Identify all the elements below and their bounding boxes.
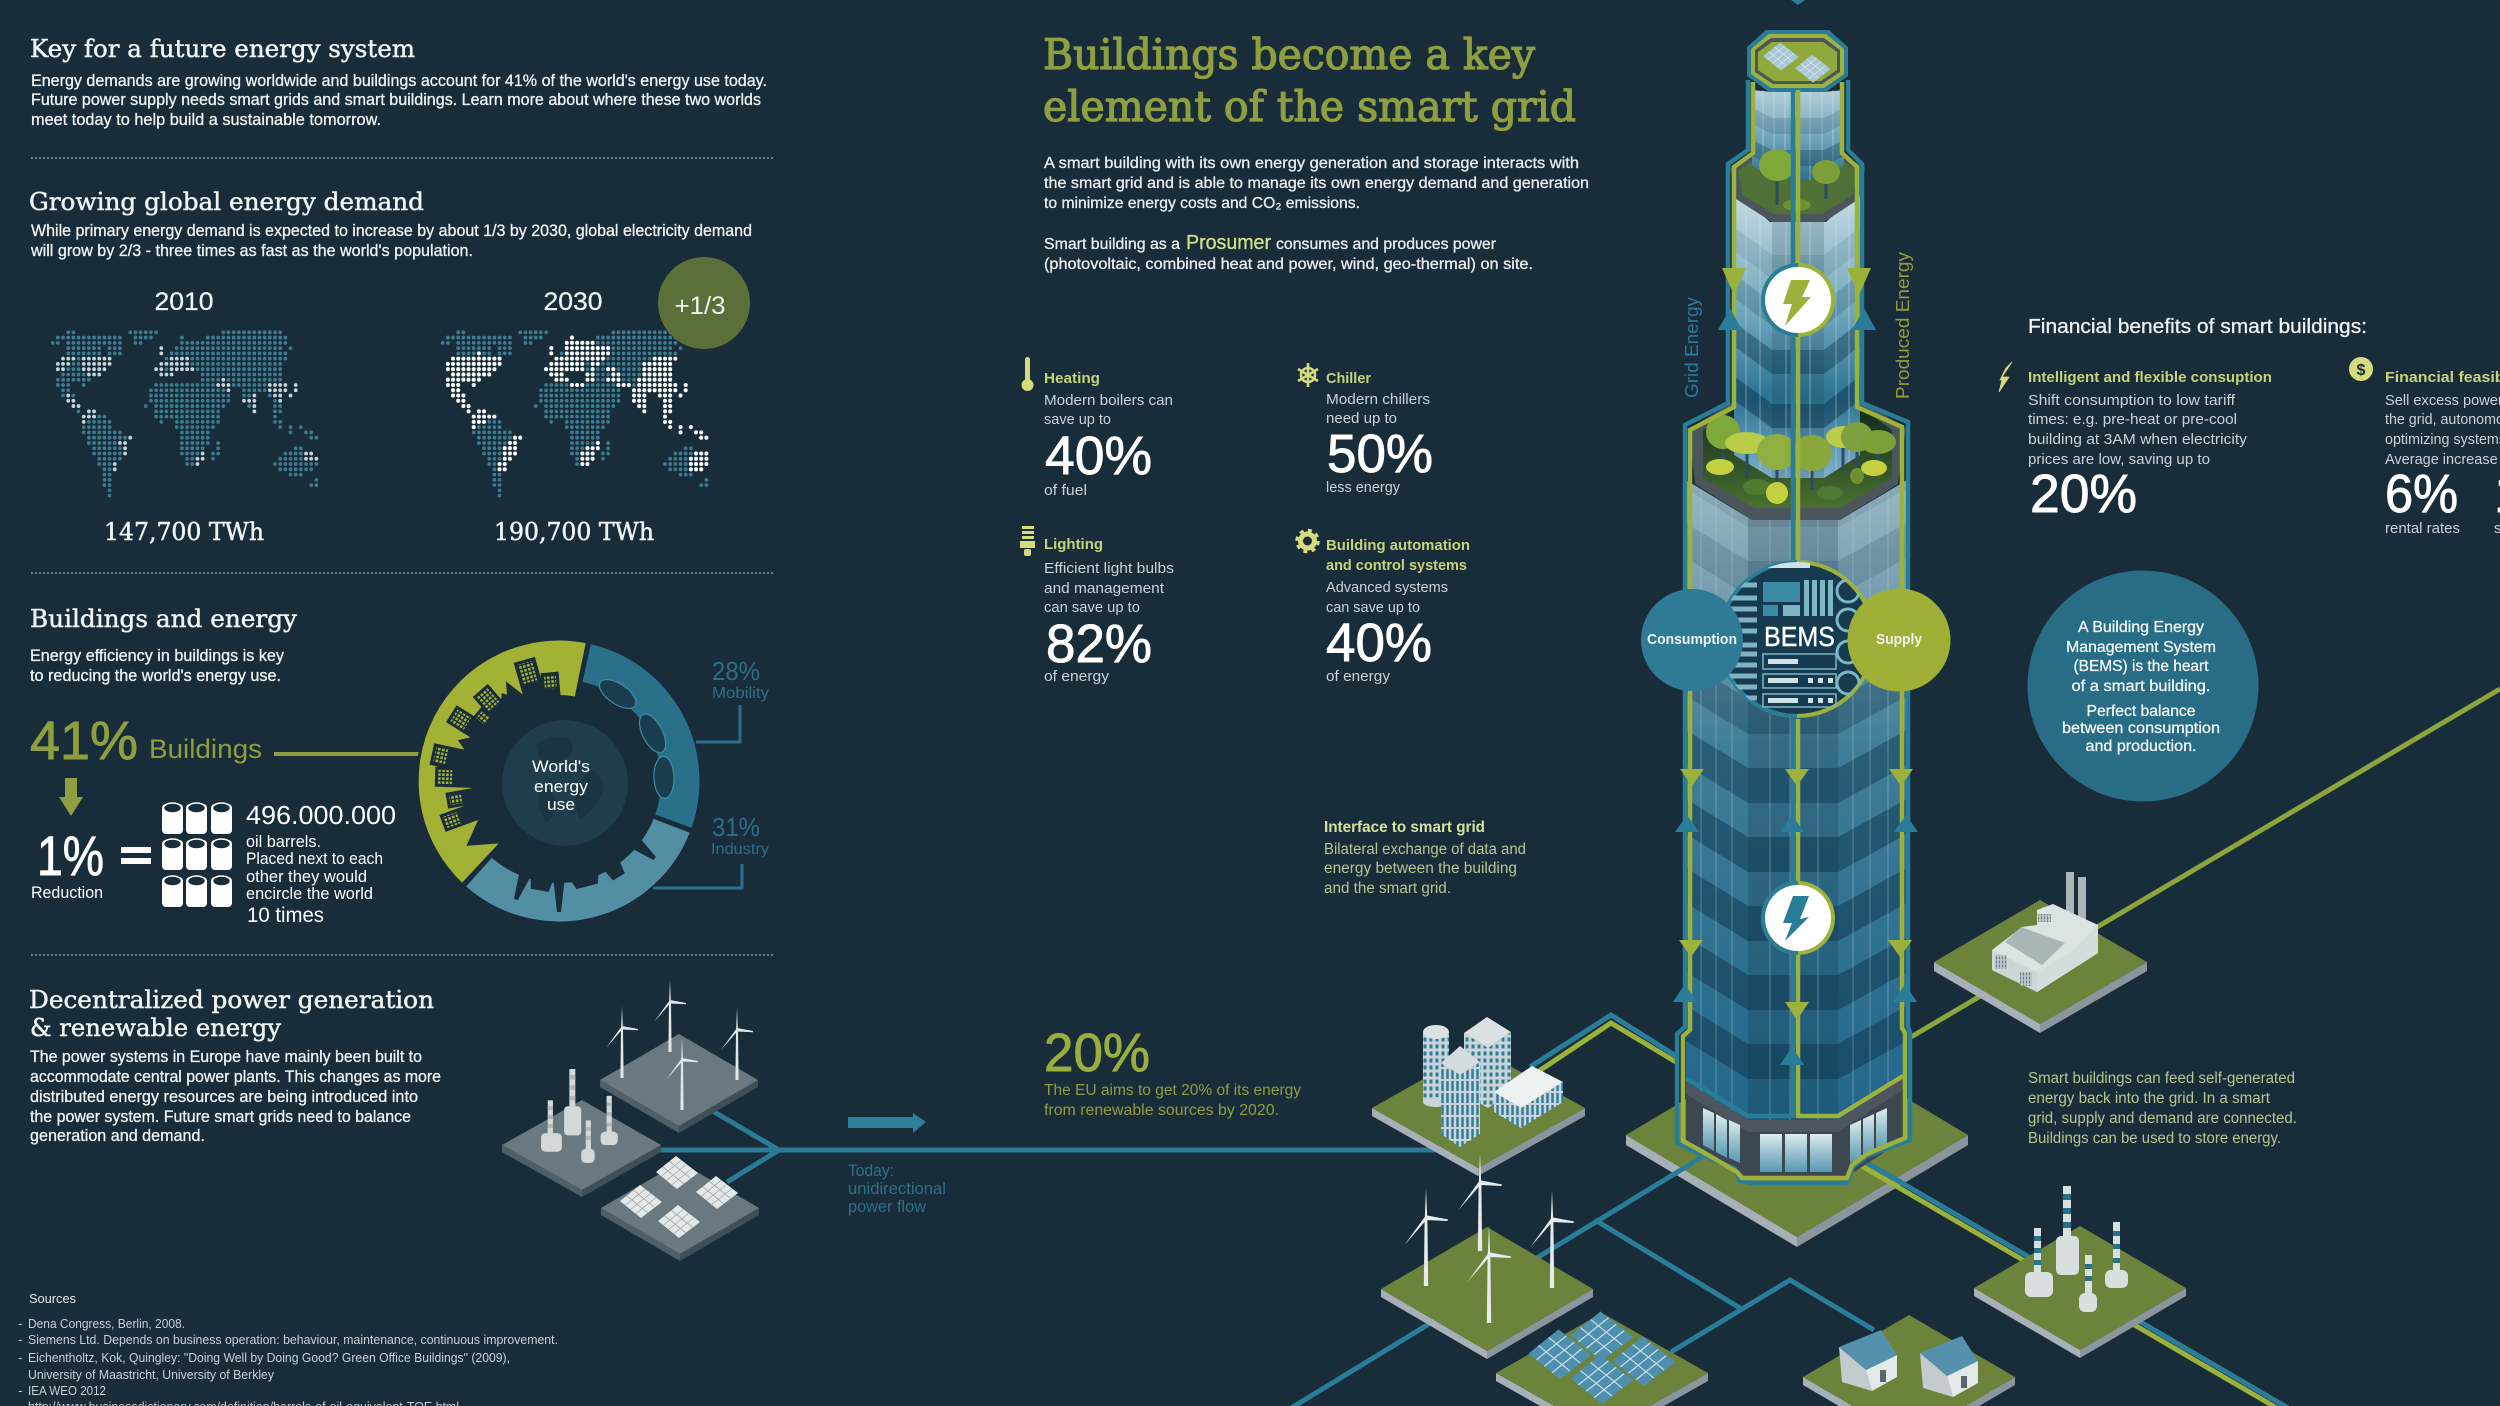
label: today unidirectional: power flow bbox=[848, 1197, 927, 1216]
segment: industry bbox=[464, 781, 692, 923]
section: buildings and energy bbox=[30, 605, 769, 927]
benefit: flexible consumption: 20% bbox=[2030, 464, 2137, 524]
text: smart building intro: consumes and produces power bbox=[1276, 236, 1497, 253]
callout: BEMS explanation: Perfect balance bbox=[2086, 703, 2196, 720]
trees on platform 2 bbox=[1759, 149, 1840, 211]
intro: key for a future energy system: Key for a future energy system bbox=[30, 35, 415, 63]
block: lighting: and management bbox=[1044, 580, 1165, 597]
sources: IEA WEO 2012 bbox=[28, 1383, 106, 1398]
benefit: flexible consumption: building at 3AM when electricity bbox=[2028, 431, 2248, 448]
arrow: unidirectional flow bbox=[848, 1113, 926, 1133]
sources: Sources bbox=[29, 1291, 76, 1306]
icon: light bulb bbox=[1020, 526, 1035, 556]
block: building automation: of energy bbox=[1326, 668, 1391, 685]
tile: green solar bbox=[1496, 1312, 1708, 1406]
icon: gear bbox=[1297, 530, 1318, 552]
text: smart building intro: Prosumer bbox=[1186, 232, 1271, 254]
roof with solar panels bbox=[1747, 30, 1848, 92]
stat: 1% reduction bbox=[31, 824, 104, 902]
block: building automation: Advanced systems bbox=[1326, 579, 1448, 596]
text: feed back into the grid: Buildings can be used to store energy. bbox=[2028, 1130, 2281, 1147]
block: heating: 40% bbox=[1045, 426, 1152, 486]
donut chart: world's energy use bbox=[417, 639, 701, 923]
panel: financial benefits bbox=[1999, 316, 2500, 537]
icon: lightning circle top bbox=[1761, 263, 1835, 337]
text: interface to smart grid bbox=[1324, 819, 1526, 897]
block: lighting: Lighting bbox=[1044, 536, 1103, 553]
value: 147,700 TWh: 147,700 TWh bbox=[104, 518, 264, 546]
grid lines: today bbox=[660, 1110, 1435, 1182]
flow arrows bbox=[1679, 268, 1913, 1020]
garden platform 2 bbox=[1730, 152, 1865, 222]
building contour lines bbox=[1677, 80, 1910, 1183]
text: smart building intro: to minimize energy costs and CO₂ emissions. bbox=[1044, 195, 1360, 212]
label: BEMS: BEMS bbox=[1764, 621, 1835, 652]
segment: mobility bbox=[559, 642, 701, 830]
text: decentralized body: generation and demand. bbox=[30, 1127, 205, 1145]
text: decentralized body: the power system. Future smart grids need to balance bbox=[30, 1108, 411, 1126]
heading: growing demand: Growing global energy demand bbox=[29, 188, 424, 216]
intro: key for a future energy system bbox=[30, 35, 767, 129]
benefit: financial feasibility bbox=[2385, 369, 2500, 537]
callout: BEMS explanation: between consumption bbox=[2062, 720, 2220, 737]
factory stacks bbox=[2066, 872, 2086, 929]
text: interface to smart grid: and the smart grid. bbox=[1324, 880, 1451, 897]
section: growing global energy demand bbox=[29, 188, 752, 546]
intro: key for a future energy system: Future power supply needs smart grids and smart buildings. Learn more about where these two worlds bbox=[31, 91, 761, 109]
block: heating: save up to bbox=[1044, 411, 1111, 428]
text: barrels fact: 496.000.000 bbox=[246, 800, 396, 830]
benefit: financial feasibility: 6% bbox=[2385, 464, 2458, 524]
heading: decentralized bbox=[29, 986, 434, 1042]
text: barrels fact bbox=[246, 800, 396, 927]
stat: 41% buildings bbox=[30, 711, 424, 771]
upper shaft bbox=[1752, 90, 1844, 180]
front tower bbox=[1441, 1046, 1480, 1147]
tile: grey wind bbox=[600, 980, 758, 1133]
heading: decentralized: Decentralized power generation bbox=[29, 986, 434, 1014]
benefit: flexible consumption: times: e.g. pre-heat or pre-cool bbox=[2028, 411, 2237, 428]
block: building automation: Building automation bbox=[1326, 537, 1470, 554]
text: smart building intro: Smart building as a bbox=[1044, 236, 1180, 253]
label: world's energy use: World's bbox=[532, 758, 590, 776]
text: efficiency intro: to reducing the world's energy use. bbox=[30, 667, 281, 685]
cars bbox=[595, 674, 675, 799]
text: growing demand body: While primary energy demand is expected to increase by about 1/3 by 2030, global electricity demand bbox=[31, 222, 752, 240]
block: lighting: Efficient light bulbs bbox=[1044, 560, 1174, 577]
skyline bbox=[430, 657, 561, 861]
text: growing demand body bbox=[30, 222, 752, 260]
circle: supply bbox=[1848, 588, 1950, 692]
icon: dollar bbox=[2349, 357, 2373, 381]
block: heating bbox=[1022, 357, 1173, 499]
block: building automation bbox=[1297, 530, 1470, 685]
block: building automation: can save up to bbox=[1326, 599, 1420, 616]
stat: 41% buildings: 41% bbox=[30, 711, 138, 771]
segment: buildings bbox=[417, 639, 588, 885]
badge: +1/3: +1/3 bbox=[674, 292, 726, 320]
text: feed back into the grid: energy back into the grid. In a smart bbox=[2028, 1090, 2271, 1107]
sources: Siemens Ltd. Depends on business operation: behaviour, maintenance, continuous improvement. bbox=[28, 1332, 558, 1347]
callout: 28% mobility bbox=[696, 656, 769, 742]
hole bbox=[489, 681, 661, 883]
house 2 bbox=[1920, 1336, 1978, 1397]
intro: key for a future energy system: Energy demands are growing worldwide and buildings account for 41% of the world's energy use today. bbox=[31, 72, 767, 90]
block: chiller: 50% bbox=[1327, 424, 1433, 484]
value: 190,700 TWh: 190,700 TWh bbox=[494, 518, 654, 546]
lower shaft bbox=[1686, 454, 1907, 1120]
sources: - bbox=[18, 1383, 22, 1398]
ground floor bbox=[1686, 1078, 1903, 1176]
benefit: flexible consumption: Intelligent and flexible consuption bbox=[2028, 369, 2272, 386]
callout: BEMS explanation: of a smart building. bbox=[2072, 678, 2210, 695]
tile: grey solar bbox=[601, 1156, 759, 1261]
low block bbox=[1494, 1066, 1563, 1128]
stat: EU 20%: 20% bbox=[1044, 1023, 1150, 1083]
benefit: flexible consumption bbox=[2028, 369, 2272, 524]
tile: houses bbox=[1803, 1315, 2015, 1406]
callout: 28% mobility: 28% bbox=[712, 656, 760, 686]
text: decentralized body: distributed energy resources are being introduced into bbox=[30, 1088, 418, 1106]
garden platform 3 bbox=[1689, 400, 1906, 520]
block: chiller bbox=[1298, 363, 1433, 496]
globe core bbox=[502, 720, 628, 846]
block: lighting bbox=[1020, 526, 1174, 685]
green line: factory to right edge bbox=[1911, 689, 2500, 1037]
block: chiller: need up to bbox=[1326, 410, 1397, 427]
text: decentralized body: accommodate central power plants. This changes as more bbox=[30, 1068, 441, 1086]
label: 2010: 2010 bbox=[154, 288, 214, 316]
text: barrels fact: Placed next to each bbox=[246, 849, 383, 868]
tile: grey power plant bbox=[502, 1069, 661, 1197]
text: feed back into the grid: grid, supply and demand are connected. bbox=[2028, 1110, 2297, 1127]
tile: main tower ground bbox=[1626, 1033, 1968, 1247]
cylinder tower bbox=[1423, 1025, 1449, 1107]
equals sign bbox=[121, 847, 151, 864]
text: barrels fact: other they would bbox=[246, 867, 367, 886]
label: grid energy: Grid Energy bbox=[1682, 297, 1702, 398]
label: world's energy use: energy bbox=[534, 778, 589, 796]
block: heating: of fuel bbox=[1044, 482, 1087, 499]
dot map 2010 bbox=[53, 332, 317, 496]
sources: Eichentholtz, Kok, Quingley: "Doing Well by Doing Good? Green Office Buildings" (2009), bbox=[28, 1350, 510, 1365]
tile: factory bbox=[1934, 872, 2147, 1033]
section: decentralized power generation bbox=[29, 986, 441, 1145]
heading: financial benefits: Financial benefits of smart buildings: bbox=[2028, 316, 2367, 338]
text: interface to smart grid: Bilateral exchange of data and bbox=[1324, 841, 1526, 858]
text: barrels fact: 10 times bbox=[247, 904, 324, 927]
circle: consumption bbox=[1641, 589, 1743, 691]
text: interface to smart grid: energy between the building bbox=[1324, 860, 1517, 877]
icon: lightning circle bottom bbox=[1761, 881, 1835, 955]
label: today unidirectional: Today: bbox=[848, 1161, 894, 1180]
text: smart building intro: A smart building with its own energy generation and storage interacts with bbox=[1044, 155, 1579, 172]
text: barrels fact: encircle the world bbox=[246, 884, 373, 903]
sources: - bbox=[18, 1350, 22, 1365]
block: chiller: less energy bbox=[1326, 479, 1400, 496]
block: chiller: Modern chillers bbox=[1326, 391, 1430, 408]
text: efficiency intro: Energy efficiency in buildings is key bbox=[30, 647, 285, 665]
text: decentralized body bbox=[30, 1048, 441, 1145]
label: today unidirectional: unidirectional bbox=[848, 1179, 946, 1198]
text: barrels fact: oil barrels. bbox=[246, 832, 321, 851]
text: smart building intro: the smart grid and is able to manage its own energy demand and generation bbox=[1044, 175, 1589, 192]
block: lighting: 82% bbox=[1046, 614, 1152, 674]
back tower bbox=[1464, 1017, 1511, 1108]
block: heating: Modern boilers can bbox=[1044, 392, 1173, 409]
text: efficiency intro bbox=[30, 647, 285, 685]
heading: decentralized: & renewable energy bbox=[30, 1014, 281, 1042]
icon: lightning bbox=[1999, 362, 2012, 392]
callout: 31% industry bbox=[653, 812, 769, 888]
circle: consumption: Consumption bbox=[1647, 631, 1737, 648]
text: feed back into the grid: Smart buildings can feed self-generated bbox=[2028, 1070, 2295, 1087]
stat: EU 20% bbox=[1044, 1023, 1301, 1119]
sources: - bbox=[18, 1316, 22, 1331]
house 1 bbox=[1839, 1330, 1897, 1391]
stat: EU 20%: from renewable sources by 2020. bbox=[1044, 1102, 1279, 1119]
sources bbox=[18, 1291, 558, 1406]
icon: oil barrels bbox=[162, 803, 232, 907]
block: lighting: of energy bbox=[1044, 668, 1110, 685]
block: building automation: 40% bbox=[1326, 613, 1432, 673]
arrow: down bbox=[59, 778, 83, 816]
icon: snowflake bbox=[1298, 363, 1318, 387]
arrow tip: top of tower bbox=[1791, 0, 1805, 5]
stat: 1% reduction: 1% bbox=[37, 824, 104, 887]
callout: 31% industry: Industry bbox=[711, 841, 769, 858]
title: buildings become a key element: Buildings become a key bbox=[1043, 30, 1535, 79]
label: today unidirectional bbox=[848, 1161, 946, 1216]
sources: University of Maastricht, University of Berkley bbox=[28, 1367, 274, 1382]
dot map 2030 bbox=[443, 332, 707, 496]
block: lighting: can save up to bbox=[1044, 599, 1140, 616]
block: chiller: Chiller bbox=[1326, 370, 1371, 387]
title: buildings become a key element bbox=[1043, 30, 1576, 131]
text: decentralized body: The power systems in Europe have mainly been built to bbox=[30, 1048, 422, 1066]
text: growing demand body: will grow by 2/3 - three times as fast as the world's population. bbox=[30, 242, 473, 260]
callout: 31% industry: 31% bbox=[712, 812, 760, 842]
callout: BEMS explanation: (BEMS) is the heart bbox=[2074, 658, 2209, 675]
ground floor windows bbox=[1703, 1108, 1887, 1172]
tile: green power plant bbox=[1974, 1186, 2186, 1358]
callout: BEMS explanation bbox=[2028, 570, 2258, 802]
badge: +1/3 bbox=[658, 257, 750, 349]
central energy line bbox=[1793, 90, 1798, 1118]
sources: - bbox=[18, 1332, 22, 1347]
text: interface to smart grid: Interface to smart grid bbox=[1324, 819, 1485, 836]
callout: 28% mobility: Mobility bbox=[712, 685, 769, 702]
block: building automation: and control systems bbox=[1326, 557, 1467, 574]
circle: supply: Supply bbox=[1876, 631, 1923, 648]
BEMS circle bbox=[1726, 560, 1866, 718]
factory building bbox=[1992, 904, 2098, 992]
callout: BEMS explanation: A Building Energy bbox=[2078, 619, 2204, 636]
tile: office buildings bbox=[1372, 1017, 1585, 1176]
smart building tower bbox=[1641, 30, 1950, 1183]
stat: EU 20%: The EU aims to get 20% of its energy bbox=[1044, 1082, 1301, 1099]
stat: 41% buildings: Buildings bbox=[149, 734, 262, 764]
grid lines: smart grid bbox=[1270, 1015, 2300, 1406]
stat: 1% reduction: Reduction bbox=[31, 884, 103, 902]
block: heating: Heating bbox=[1044, 370, 1100, 387]
middle shaft bbox=[1734, 190, 1860, 480]
icon: thermometer bbox=[1022, 357, 1034, 391]
label: world's energy use: use bbox=[547, 796, 575, 814]
label: world's energy use bbox=[532, 758, 590, 814]
callout: BEMS explanation: and production. bbox=[2086, 738, 2196, 755]
benefit: flexible consumption: Shift consumption to low tariff bbox=[2028, 392, 2236, 409]
title: buildings become a key element: element of the smart grid bbox=[1043, 82, 1576, 131]
text: feed back into the grid bbox=[2028, 1070, 2297, 1147]
label: produced energy: Produced Energy bbox=[1893, 252, 1913, 399]
tile: green wind bbox=[1381, 1153, 1593, 1359]
sources: Dena Congress, Berlin, 2008. bbox=[28, 1316, 185, 1331]
callout: BEMS explanation: Management System bbox=[2066, 639, 2216, 656]
icon: dollar: $ bbox=[2357, 362, 2366, 379]
benefit: financial feasibility: rental rates bbox=[2385, 520, 2460, 537]
text: smart building intro bbox=[1044, 155, 1589, 273]
text: smart building intro: (photovoltaic, combined heat and power, wind, geo-thermal) on site. bbox=[1044, 256, 1533, 273]
factories bbox=[508, 828, 660, 912]
heading: buildings and energy: Buildings and energy bbox=[30, 605, 297, 633]
label: 2030: 2030 bbox=[544, 288, 602, 316]
benefit: flexible consumption: prices are low, saving up to bbox=[2028, 451, 2210, 468]
intro: key for a future energy system: meet today to help build a sustainable tomorrow. bbox=[31, 111, 381, 129]
trees on platform 3 bbox=[1706, 415, 1896, 504]
